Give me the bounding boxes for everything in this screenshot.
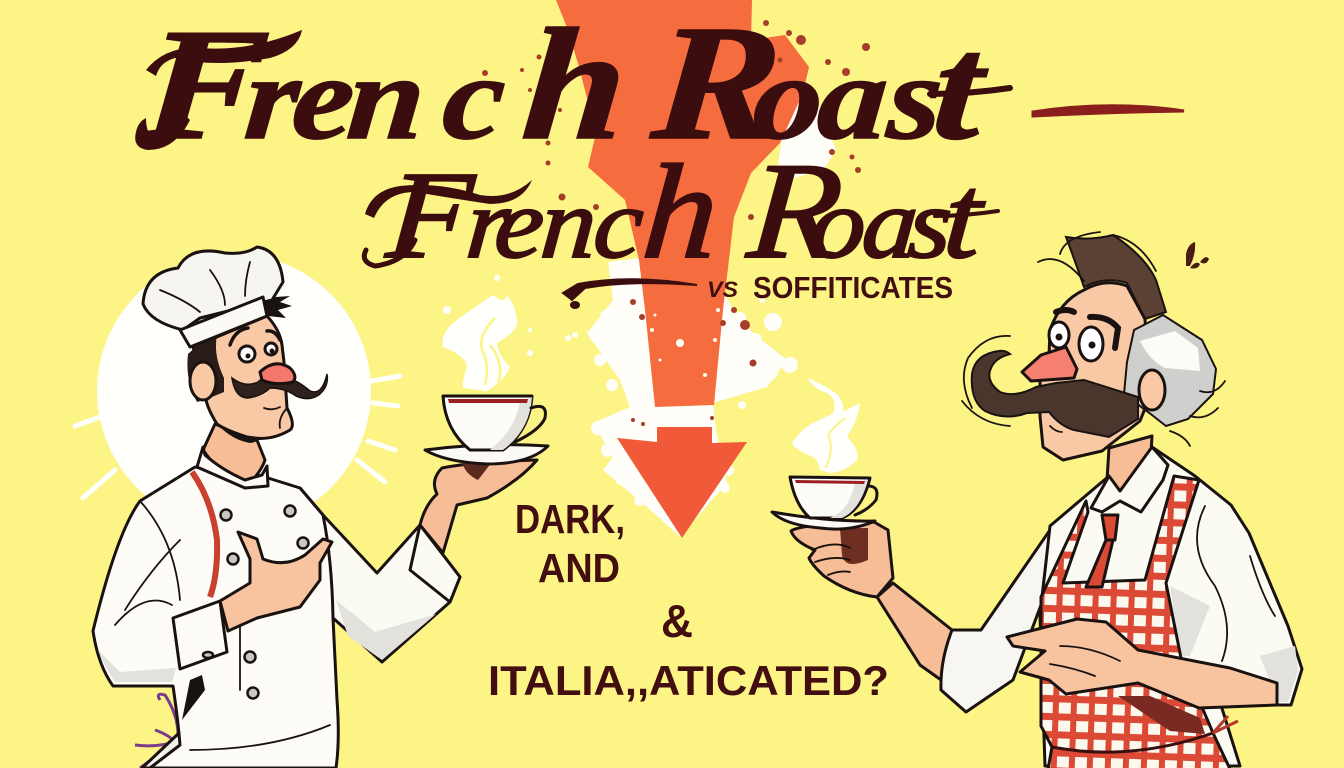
right sleeve xyxy=(300,488,460,662)
apron skirt xyxy=(142,734,336,768)
saucer xyxy=(425,445,548,464)
subtitle: French Roast second line: oas xyxy=(807,168,956,279)
title: French Roast large: F xyxy=(136,0,274,173)
sweat marks xyxy=(1186,242,1209,268)
ear xyxy=(190,362,216,400)
back hair xyxy=(262,296,292,318)
title: French Roast large: t xyxy=(928,5,993,171)
halo rays xyxy=(75,376,400,498)
steam xyxy=(792,378,860,473)
text block: dark, and xyxy=(515,496,625,591)
subtitle: French Roast second line xyxy=(364,135,998,287)
title: French Roast large: h xyxy=(517,0,680,173)
pointing hand and arm xyxy=(1007,619,1277,708)
central splash and arrow xyxy=(482,0,870,538)
swash and vs label: SOFFITICATES xyxy=(753,270,953,305)
subtitle: French Roast second line: h xyxy=(638,136,761,286)
jacket buttons xyxy=(203,506,308,698)
ampersand: & xyxy=(661,595,693,647)
orange paint streak xyxy=(556,0,809,407)
nose xyxy=(260,364,295,384)
subtitle: French Roast second line: renc xyxy=(463,168,647,279)
arrow head xyxy=(617,427,747,538)
raised hand xyxy=(420,460,537,553)
eyes xyxy=(1049,322,1069,348)
mouth xyxy=(264,407,287,428)
apron ribbon xyxy=(135,694,180,768)
jaw shadow xyxy=(217,424,262,443)
text block: italian sophisticated: ITALIA,,ATICATED? xyxy=(488,657,889,704)
face xyxy=(1040,283,1150,460)
head xyxy=(193,316,292,438)
title: French Roast large xyxy=(135,0,1184,174)
left sleeve xyxy=(941,530,1050,712)
title: French Roast large: oas xyxy=(749,32,948,165)
subtitle: French Roast second line: t xyxy=(940,151,989,284)
left arm shading xyxy=(98,650,176,682)
neck xyxy=(203,424,265,487)
eyebrows xyxy=(1056,310,1118,348)
steam xyxy=(442,275,532,391)
mouth xyxy=(1050,426,1062,432)
nose xyxy=(1022,347,1077,381)
white paint splatter xyxy=(527,80,836,537)
collar xyxy=(1091,447,1168,512)
apron xyxy=(1041,476,1238,768)
tie xyxy=(1086,515,1118,587)
red apron strap xyxy=(192,472,217,597)
grey hair xyxy=(1124,315,1216,426)
text block: dark, and: AND xyxy=(538,545,620,591)
jacket body xyxy=(93,467,338,768)
title underline stroke xyxy=(1033,106,1184,116)
hair top xyxy=(1066,235,1166,319)
title: French Roast large: renc xyxy=(240,32,510,165)
left cuff xyxy=(173,601,227,669)
cup handle xyxy=(855,486,877,515)
halo circle xyxy=(97,254,371,528)
figure: French chef xyxy=(75,247,548,768)
chef hat xyxy=(143,247,283,347)
shirt xyxy=(1040,447,1302,766)
coffee cup in barista hand xyxy=(772,378,893,597)
moustache xyxy=(972,351,1138,437)
eyes xyxy=(239,346,255,362)
ear xyxy=(1139,370,1165,410)
collar xyxy=(197,447,268,488)
swash and vs label xyxy=(563,270,953,309)
apron fold and waist xyxy=(1118,696,1205,734)
left forearm xyxy=(877,583,965,697)
holding hand xyxy=(791,522,893,597)
figure: Italian barista xyxy=(877,232,1302,768)
cup xyxy=(790,477,870,518)
eyebrows xyxy=(230,328,280,345)
moustache xyxy=(232,374,327,399)
saucer xyxy=(772,512,875,529)
text block: dark, and: DARK, xyxy=(515,496,625,542)
cup handle xyxy=(515,406,545,442)
chest hand xyxy=(220,532,332,631)
neck xyxy=(1107,436,1152,501)
subtitle: French Roast second line: R xyxy=(742,135,848,287)
hair xyxy=(187,335,224,402)
subtitle: French Roast second line: F xyxy=(382,147,479,285)
paint speckles xyxy=(482,20,870,426)
cup xyxy=(443,396,532,450)
swash and vs label: VS xyxy=(707,277,738,302)
hair wisps xyxy=(1038,232,1156,281)
paint flecks on the streak xyxy=(650,308,720,377)
